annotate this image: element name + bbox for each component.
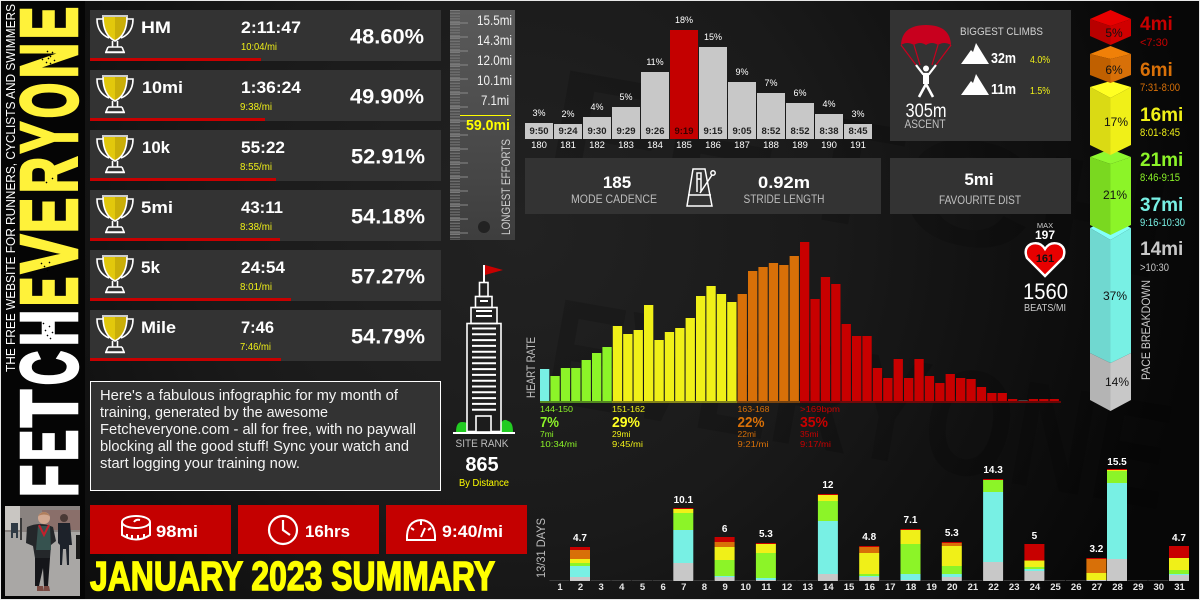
bar: day 16 — [859, 532, 879, 581]
panel: 10mi result — [90, 70, 441, 121]
heart rate zone: green: 7mi — [540, 429, 554, 439]
day labels: 11 — [761, 582, 772, 593]
heart rate zone: green: 10:34/mi — [540, 439, 577, 449]
cadence axis labels: 184 — [647, 140, 663, 151]
icon: mountain — [961, 43, 989, 64]
icon: metronome — [687, 169, 715, 206]
day labels: 9 — [722, 582, 728, 593]
logo: FETCHEVERYONE: Y — [4, 122, 94, 153]
background watermark — [534, 36, 1184, 541]
day labels: 6 — [660, 582, 666, 593]
stat: average pace — [386, 505, 527, 554]
cadence percentages: 9% — [735, 67, 749, 77]
bars: red zone — [800, 242, 1059, 401]
panel: favourite distance: 5mi — [964, 170, 994, 189]
left strip background — [1, 1, 85, 599]
panel: longest efforts ruler — [450, 10, 515, 240]
panel: longest efforts ruler: 59.0mi — [466, 118, 510, 134]
icon: mountain small — [961, 74, 989, 95]
day labels: 7 — [681, 582, 686, 593]
cadence pace labels: 9:50 — [529, 126, 549, 137]
panel: cadence and stride: 185 — [603, 173, 631, 192]
axis label: HEART RATE — [524, 337, 538, 398]
icon: speedometer — [407, 520, 435, 540]
cadence axis labels: 190 — [821, 140, 837, 151]
cadence percentages: 2% — [561, 109, 575, 119]
day labels: 18 — [906, 582, 916, 593]
logo: FETCHEVERYONE: N — [4, 43, 94, 78]
heart rate zone: red: >169bpm — [800, 404, 840, 414]
site rank tower: SITE RANK — [456, 438, 509, 450]
heart rate zone: red: 35% — [800, 414, 828, 431]
heart rate summary: 161 — [1036, 253, 1054, 265]
panel: 5mi result: 5mi — [141, 198, 173, 217]
panel: 5k result: 8:01/mi — [240, 282, 272, 293]
panel: longest efforts ruler: 15.5mi — [477, 12, 512, 28]
panel: 5mi result: 8:38/mi — [240, 222, 272, 233]
pace legend: 6mi — [1140, 60, 1173, 81]
icon: heart — [1026, 243, 1064, 276]
pace breakdown stack — [1090, 10, 1131, 411]
panel: HM result: 10:04/mi — [241, 42, 277, 53]
logo: FETCHEVERYONE — [4, 7, 94, 497]
heart rate summary: MAX — [1037, 221, 1053, 230]
stat: distance — [90, 505, 231, 554]
stat: time: 16hrs — [305, 522, 350, 541]
bar: day 27: 3.2 — [1089, 544, 1104, 555]
panel: Mile result: Mile — [141, 318, 176, 337]
cadence chart — [525, 15, 872, 151]
segment: red — [1090, 10, 1131, 45]
background watermark: FETCH — [534, 36, 1184, 311]
icon: flag — [483, 265, 503, 282]
heart rate zone: green — [540, 404, 577, 449]
text box: intro message: training, generated by the awesome — [100, 405, 328, 421]
logo: FETCHEVERYONE: E — [4, 277, 94, 306]
cadence pace labels: 8:45 — [848, 126, 868, 137]
stack percentages: 37% — [1103, 289, 1127, 303]
heart rate zone: orange: 9:21/mi — [738, 439, 769, 449]
stack percentages: 6% — [1105, 63, 1123, 77]
panel: 5k result: 5k — [141, 258, 161, 277]
heart rate zone: yellow — [612, 404, 645, 449]
cadence pace labels: 9:15 — [703, 126, 723, 137]
bar: day 20 — [942, 528, 962, 581]
panel: 10k result: 52.91% — [351, 146, 425, 168]
heart rate zone: yellow: 29% — [612, 414, 640, 431]
panel: Mile result: 7:46/mi — [240, 342, 271, 353]
daily distance chart — [534, 457, 1189, 593]
panel: cadence and stride: MODE CADENCE — [571, 192, 657, 206]
bar: day 24: 5 — [1032, 531, 1038, 542]
day labels: 10 — [740, 582, 751, 593]
logo: FETCHEVERYONE: E — [4, 198, 94, 233]
day labels: 29 — [1133, 582, 1143, 593]
panel: 10mi result: 1:36:24 — [241, 78, 302, 97]
title: JANUARY 2023 SUMMARY — [90, 553, 495, 599]
stack percentages: 14% — [1105, 375, 1129, 389]
site rank tower: 865 — [465, 454, 499, 476]
axis line — [540, 402, 1061, 403]
pace legend: 9:16-10:30 — [1140, 217, 1185, 229]
heart rate zone: orange — [738, 404, 770, 449]
pace legend: 8:46-9:15 — [1140, 172, 1180, 184]
bar: day 20: 5.3 — [945, 528, 959, 539]
bar: day 16: 4.8 — [862, 532, 877, 543]
cadence pace labels: 9:19 — [674, 126, 694, 137]
logo: FETCHEVERYONE: V — [4, 235, 94, 273]
stat: average pace: 9:40/mi — [442, 522, 503, 541]
cadence percentages: 4% — [822, 99, 836, 109]
heart rate zone: green: 7% — [540, 414, 559, 431]
heart rate zone: yellow: 9:45/mi — [612, 439, 643, 449]
day labels: 16 — [864, 582, 875, 593]
photo of runner — [5, 506, 80, 596]
bar: day 9: 6 — [722, 524, 728, 535]
cadence pace labels: 9:05 — [732, 126, 752, 137]
panel: HM result: HM — [141, 18, 171, 37]
day labels: 15 — [844, 582, 855, 593]
cadence pace labels: 8:52 — [790, 126, 810, 137]
panel: 10k result: 55:22 — [241, 138, 285, 157]
pace legend: PACE BREAKDOWN — [1139, 280, 1153, 380]
icon: building — [467, 282, 501, 432]
cadence pace labels: 9:26 — [645, 126, 665, 137]
pace legend: 21mi — [1140, 150, 1183, 171]
text box: intro message: start logging your training now. — [100, 456, 300, 472]
day labels: 13 — [802, 582, 813, 593]
day labels — [557, 582, 1185, 593]
bar: day 11 — [756, 529, 776, 581]
pace legend: 14mi — [1140, 239, 1183, 260]
cadence percentages: 4% — [590, 102, 604, 112]
bar: day 18: 7.1 — [904, 515, 918, 526]
day labels: 5 — [640, 582, 646, 593]
pace legend: <7:30 — [1140, 37, 1168, 49]
panel: Mile result: 54.79% — [351, 326, 425, 348]
heart rate zone: orange: 22mi — [738, 429, 756, 439]
cadence axis labels: 191 — [850, 140, 866, 151]
logo: FETCHEVERYONE: E — [4, 430, 94, 461]
bar: day 2: 4.7 — [573, 533, 587, 544]
panel: favourite distance — [890, 158, 1071, 214]
bar: day 27 — [1086, 544, 1106, 581]
text box: intro message: Here's a fabulous infographic for my month of — [100, 388, 399, 404]
logo: FETCHEVERYONE: H — [4, 310, 94, 346]
cadence percentages: 6% — [793, 88, 807, 98]
cadence pace labels: 8:52 — [761, 126, 781, 137]
panel: 5mi result: 54.18% — [351, 206, 425, 228]
bar: day 14: 12 — [822, 480, 834, 491]
panel: longest efforts ruler: 14.3mi — [477, 32, 512, 48]
icon: bushes — [456, 420, 513, 432]
panel: Mile result — [90, 310, 441, 361]
cadence percentages — [532, 15, 865, 119]
day labels: 26 — [1071, 582, 1081, 593]
panel: ascent: ASCENT — [904, 117, 946, 131]
axis label: 13/31 DAYS — [534, 518, 548, 578]
stat: distance: 98mi — [156, 522, 198, 541]
pace legend — [1139, 14, 1185, 380]
icon: clock — [269, 516, 297, 544]
panel: 5mi result: 43:11 — [241, 198, 283, 217]
bars: yellow zone — [613, 286, 736, 401]
bar: day 28: 15.5 — [1107, 457, 1127, 468]
heart rate zone: orange: 22% — [738, 414, 764, 431]
bar: day 11: 5.3 — [759, 529, 773, 540]
segment: orange — [1090, 46, 1131, 83]
bars: orange zone — [738, 256, 799, 401]
panel: 5k result: 24:54 — [241, 258, 286, 277]
cadence percentages: 3% — [532, 108, 546, 118]
cadence percentages: 15% — [704, 32, 722, 42]
day labels: 23 — [1009, 582, 1019, 593]
cadence percentages: 5% — [619, 92, 633, 102]
panel: ascent: 11m — [991, 81, 1016, 98]
panel: longest efforts ruler: LONGEST EFFORTS — [499, 139, 513, 235]
panel: cadence and stride: 0.92m — [758, 173, 810, 192]
stat: time — [238, 505, 379, 554]
stack percentages — [1103, 26, 1129, 389]
cadence axis labels: 188 — [763, 140, 779, 151]
day labels: 2 — [578, 582, 583, 593]
pace legend: 37mi — [1140, 195, 1183, 216]
day labels: 20 — [947, 582, 958, 593]
panel: Mile result: 7:46 — [241, 318, 274, 337]
site rank tower — [453, 265, 515, 489]
cadence pace labels: 9:30 — [587, 126, 607, 137]
panel: HM result: 2:11:47 — [241, 18, 301, 37]
cadence axis labels: 189 — [792, 140, 808, 151]
panel: 10k result — [90, 130, 441, 181]
icon: parachutist — [901, 25, 951, 97]
heart rate summary: BEATS/MI — [1024, 302, 1066, 314]
cadence percentages: 11% — [646, 57, 664, 67]
rest day baselines — [549, 580, 1168, 581]
cadence pace labels — [529, 126, 868, 137]
panel: longest efforts ruler: 7.1mi — [481, 92, 509, 108]
heart rate zone: red: 9:17/mi — [800, 439, 831, 449]
day labels: 8 — [702, 582, 707, 593]
day labels: 14 — [823, 582, 834, 593]
stack percentages: 17% — [1104, 115, 1128, 129]
bar: day 18 — [900, 515, 920, 581]
text box: intro message: blocking all the good stuff! Sync your watch and — [100, 439, 409, 455]
bar: day 28 — [1107, 457, 1127, 581]
bar: day 14 — [818, 480, 838, 581]
cadence axis labels: 182 — [589, 140, 605, 151]
heart rate zone: orange: 163-168 — [738, 404, 770, 414]
panel: ascent: 1.5% — [1030, 86, 1050, 97]
icon: tape measure — [122, 516, 150, 540]
heart rate summary — [1023, 221, 1068, 314]
heart rate zone: red: 35mi — [800, 429, 819, 439]
panel: 5k result: 57.27% — [351, 266, 425, 288]
bar: day 7: 10.1 — [674, 495, 693, 506]
panel: ascent: 4.0% — [1030, 55, 1050, 66]
day labels: 28 — [1112, 582, 1123, 593]
stack percentages: 21% — [1103, 188, 1127, 202]
heart rate zone: yellow: 29mi — [612, 429, 631, 439]
bar: day 9 — [715, 524, 735, 581]
cadence pace labels: 9:24 — [558, 126, 578, 137]
day labels: 31 — [1174, 582, 1185, 593]
heart rate summary: 197 — [1035, 228, 1055, 242]
panel: HM result — [90, 10, 441, 61]
logo: FETCHEVERYONE: C — [4, 351, 94, 385]
cadence axis labels: 187 — [734, 140, 750, 151]
panel: ascent — [890, 10, 1071, 141]
panel: favourite distance: FAVOURITE DIST — [939, 193, 1022, 207]
panel: ascent: 32m — [991, 50, 1016, 67]
pace legend: 8:01-8:45 — [1140, 127, 1180, 139]
logo: FETCHEVERYONE: T — [4, 390, 94, 427]
cadence axis labels: 183 — [618, 140, 634, 151]
bars: green zone — [550, 347, 612, 401]
pace legend: 4mi — [1140, 14, 1173, 35]
panel: 10k result: 10k — [142, 138, 171, 157]
heart rate histogram — [524, 242, 1061, 402]
bar: day 7 — [673, 495, 693, 581]
cadence pace labels: 9:29 — [616, 126, 636, 137]
bars: lowest zone — [540, 369, 549, 401]
cadence pace labels: 8:38 — [819, 126, 839, 137]
day labels: 17 — [885, 582, 896, 593]
pace legend: 16mi — [1140, 105, 1183, 126]
segment: grey — [1090, 353, 1131, 411]
bar: day 31 — [1169, 533, 1189, 581]
heart rate zone: green: 144-150 — [540, 404, 573, 414]
bar: day 2 — [570, 533, 590, 581]
panel: longest efforts ruler: 10.1mi — [477, 72, 512, 88]
panel: cadence and stride: STRIDE LENGTH — [744, 192, 824, 206]
day labels: 12 — [782, 582, 792, 593]
logo: FETCHEVERYONE: O — [4, 83, 94, 118]
logo: FETCHEVERYONE: F — [4, 465, 94, 497]
panel: HM result: 48.60% — [350, 26, 424, 48]
bar: day 22: 14.3 — [983, 465, 1003, 476]
cadence bars — [525, 30, 872, 139]
panel: ascent: BIGGEST CLIMBS — [960, 26, 1043, 38]
panel: cadence and stride — [525, 158, 881, 214]
panel: longest efforts ruler: 12.0mi — [477, 52, 512, 68]
bar: day 24 — [1024, 531, 1044, 581]
text box: intro message: Fetcheveryone.com - all for free, with no paywall — [100, 422, 416, 438]
logo: FETCHEVERYONE: R — [4, 157, 94, 193]
day labels: 24 — [1030, 582, 1041, 593]
cadence axis labels: 185 — [676, 140, 692, 151]
cadence axis labels: 186 — [705, 140, 721, 151]
day labels: 30 — [1154, 582, 1164, 593]
segment: yellow — [1090, 81, 1131, 155]
panel: 10mi result: 10mi — [142, 78, 183, 97]
day labels: 4 — [619, 582, 625, 593]
segment: cyan — [1090, 218, 1131, 363]
panel: 5k result — [90, 250, 441, 301]
day labels: 22 — [988, 582, 999, 593]
cadence percentages: 7% — [764, 78, 778, 88]
segment: green — [1090, 149, 1131, 235]
heart rate zone: red — [800, 404, 840, 449]
cadence axis labels — [531, 140, 866, 151]
day labels: 3 — [599, 582, 604, 593]
bar: day 22 — [983, 465, 1003, 581]
stack percentages: 5% — [1105, 26, 1123, 40]
cadence percentages: 18% — [675, 15, 693, 25]
day labels: 27 — [1092, 582, 1102, 593]
bar: day 31: 4.7 — [1172, 533, 1186, 544]
panel: 10k result: 8:55/mi — [240, 162, 272, 173]
day labels: 1 — [557, 582, 563, 593]
panel: 5mi result — [90, 190, 441, 241]
heart rate summary: 1560 — [1023, 279, 1068, 304]
day labels: 25 — [1050, 582, 1061, 593]
day labels: 21 — [968, 582, 979, 593]
heart rate zone: yellow: 151-162 — [612, 404, 645, 414]
site rank tower: By Distance — [459, 478, 509, 489]
panel: ascent: 305m — [906, 101, 946, 122]
panel: 10mi result: 49.90% — [350, 86, 424, 108]
cadence axis labels: 181 — [560, 140, 576, 151]
pace legend: >10:30 — [1140, 262, 1169, 274]
pace legend: 7:31-8:00 — [1140, 82, 1180, 94]
text box: intro message — [90, 382, 440, 490]
cadence percentages: 3% — [851, 109, 865, 119]
day labels: 19 — [926, 582, 937, 593]
panel: 10mi result: 9:38/mi — [240, 102, 272, 113]
cadence axis labels: 180 — [531, 140, 547, 151]
